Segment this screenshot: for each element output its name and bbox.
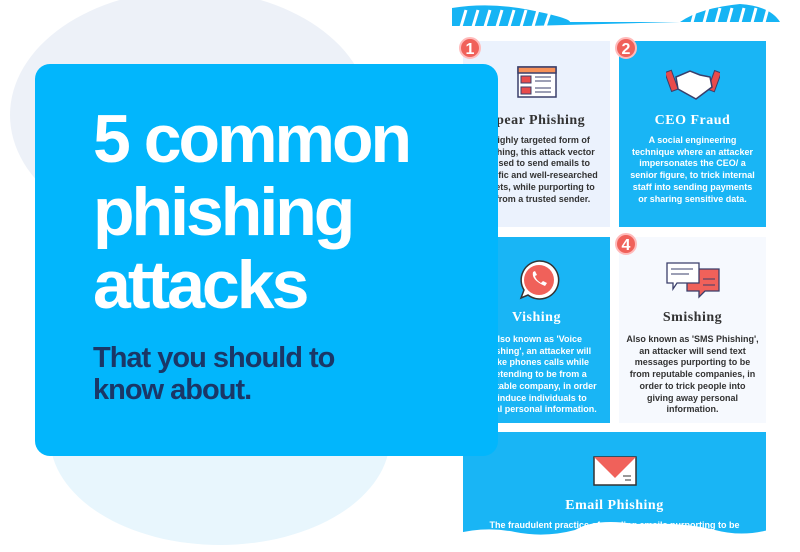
title: phishing (93, 174, 352, 250)
icon: handshake (666, 70, 720, 100)
title (93, 101, 409, 323)
badge 1 (459, 37, 481, 59)
title: 5 common (93, 101, 409, 177)
card 4: smishing: Also known as 'SMS Phishing', an attacker will send text messages purporting to be from reputable companies, in order to trick people into giving away personal information. (626, 334, 759, 414)
card 2: CEO fraud: CEO Fraud (655, 113, 730, 128)
card 5: email phishing: Email Phishing (565, 498, 664, 513)
card 1: spear phishing: A highly targeted form of phishing, this attack vector is used to send emails to specific and well-researched targets, while purporting to be from a trusted sender. (475, 135, 598, 204)
card 5: email phishing (463, 432, 766, 542)
icon: envelope (593, 456, 637, 486)
torn bottom edge (463, 522, 766, 542)
card 5: email phishing: The fraudulent practice of sending emails purporting to be from reputable companies (489, 520, 740, 542)
card 4: smishing: Smishing (663, 310, 722, 325)
background blob top (10, 0, 370, 240)
card 2: CEO fraud: A social engineering technique where an attacker impersonates the CEO/ a senior figure, to trick internal staff into sending payments or sharing sensitive data. (630, 135, 755, 204)
icon: phone bubble (520, 260, 560, 300)
badge 4: 4 (622, 237, 630, 254)
card 1: spear phishing: Spear Phishing (488, 113, 585, 128)
subtitle (93, 342, 334, 406)
card 1: spear phishing (463, 41, 610, 227)
card 4: smishing (619, 237, 766, 423)
badge 2 (615, 37, 637, 59)
badge 1: 1 (466, 41, 474, 58)
subtitle: know about. (93, 374, 251, 406)
badge 2: 2 (622, 41, 630, 58)
card 3: vishing (463, 237, 610, 423)
background blob bottom (50, 330, 390, 545)
badge 4 (615, 233, 637, 255)
card 2: CEO fraud (619, 41, 766, 227)
icon: browser window (517, 66, 557, 98)
main title panel (35, 64, 498, 456)
subtitle: That you should to (93, 342, 334, 374)
card 3: vishing: Vishing (512, 310, 561, 325)
top torn edge (452, 4, 780, 26)
card 3: vishing: Also known as 'Voice phishing', an attacker will make phones calls while pretending to be from a reputable company, in order to induce individuals to reveal personal information. (476, 334, 597, 414)
title: attacks (93, 247, 306, 323)
icon: chat bubbles (666, 262, 720, 298)
